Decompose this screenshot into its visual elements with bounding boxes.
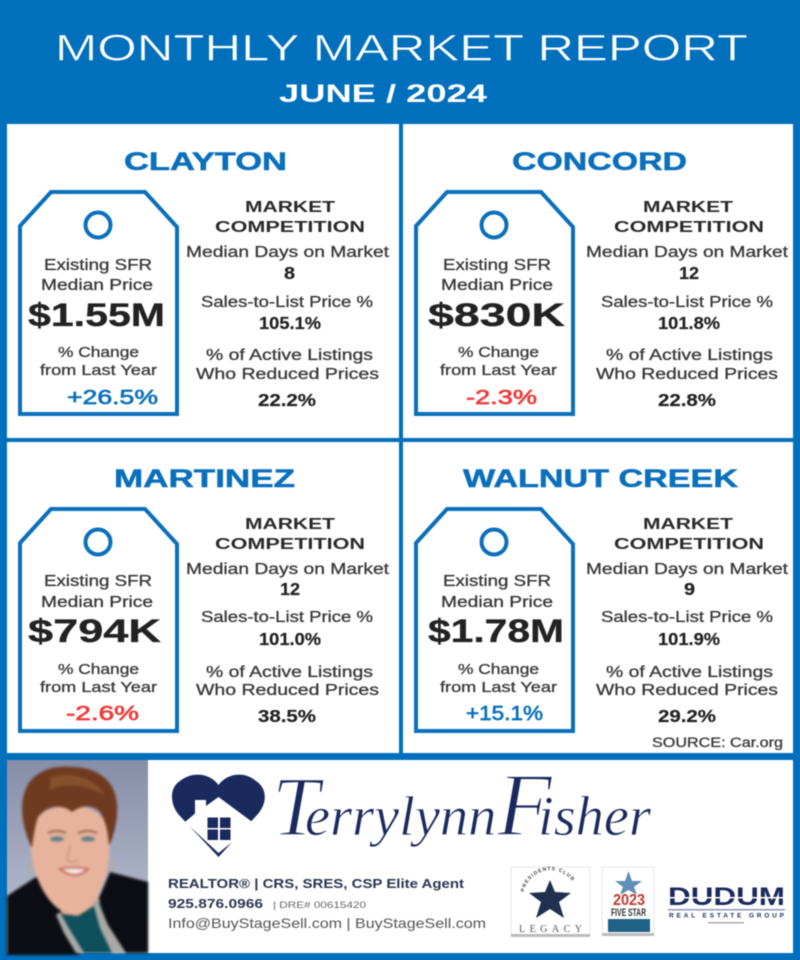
- market competition stats: Who Reduced Prices: [196, 682, 379, 699]
- price tag: % Change: [458, 344, 539, 361]
- price tag: $830K: [428, 297, 565, 333]
- market competition stats: MARKET: [245, 516, 335, 533]
- price tag: Existing SFR: [44, 573, 152, 590]
- panel: Walnut Creek: [403, 442, 793, 753]
- badge: Legacy: LEGACY: [519, 924, 582, 935]
- market competition stats: Who Reduced Prices: [596, 682, 778, 699]
- price tag: % Change: [58, 661, 139, 678]
- price tag: Median Price: [41, 277, 153, 294]
- price tag: Median Price: [441, 594, 553, 611]
- market competition stats: Sales-to-List Price %: [601, 609, 773, 626]
- price tag: from Last Year: [440, 362, 557, 379]
- market competition stats: 22.2%: [258, 390, 317, 410]
- heading: WALNUT CREEK: [463, 465, 738, 493]
- market competition stats: 9: [684, 579, 695, 599]
- market competition stats: % of Active Listings: [206, 347, 373, 364]
- market competition stats: 101.9%: [658, 629, 720, 649]
- logo: Dudum Real Estate Group: [668, 883, 785, 924]
- signature name: isher: [538, 786, 652, 848]
- badge: Legacy: PRESIDENTS CLUB: [520, 866, 575, 892]
- badge: Five Star 2023: 2023: [613, 892, 645, 909]
- market competition stats: COMPETITION: [614, 219, 764, 236]
- market competition stats: COMPETITION: [215, 219, 365, 236]
- market competition stats: COMPETITION: [215, 536, 365, 553]
- market competition stats: % of Active Listings: [206, 664, 373, 681]
- market competition stats: 12: [679, 263, 699, 283]
- agent phone: 925.876.0966: [168, 896, 263, 911]
- market competition stats: Who Reduced Prices: [196, 366, 379, 383]
- price tag: % Change: [58, 344, 139, 361]
- price tag: from Last Year: [440, 679, 557, 696]
- market competition stats: 101.8%: [658, 313, 720, 333]
- market competition stats: Median Days on Market: [586, 244, 789, 261]
- price tag: [416, 509, 573, 731]
- market competition stats: % of Active Listings: [606, 664, 773, 681]
- price tag: from Last Year: [40, 362, 157, 379]
- price tag: +15.1%: [466, 703, 543, 725]
- market competition stats: [186, 199, 390, 410]
- market competition stats: [586, 199, 789, 410]
- panel: Concord: [403, 124, 793, 438]
- market competition stats: [186, 516, 390, 726]
- price tag: % Change: [458, 661, 539, 678]
- price tag: [20, 509, 177, 731]
- license number: | DRE# 00615420: [273, 900, 366, 910]
- badge: Five Star 2023: [602, 867, 654, 936]
- signature name: T: [272, 760, 325, 854]
- price tag: $794K: [28, 613, 161, 649]
- price tag: [20, 192, 177, 414]
- market competition stats: 38.5%: [258, 706, 317, 726]
- heading: CLAYTON: [124, 148, 287, 176]
- badge: Five Star 2023: FIVE STAR: [611, 907, 646, 919]
- market competition stats: [586, 516, 789, 726]
- market competition stats: Median Days on Market: [186, 244, 390, 261]
- market competition stats: Sales-to-List Price %: [201, 609, 373, 626]
- heading: CONCORD: [512, 148, 687, 176]
- footer panel: [5, 756, 794, 957]
- market competition stats: % of Active Listings: [606, 347, 773, 364]
- price tag: [416, 192, 573, 414]
- price tag: $1.55M: [28, 297, 165, 333]
- market competition stats: 29.2%: [658, 706, 717, 726]
- market competition stats: Sales-to-List Price %: [201, 294, 373, 311]
- logo: heart with house: [172, 775, 265, 857]
- price tag: -2.6%: [66, 703, 139, 725]
- market competition stats: 22.8%: [658, 390, 717, 410]
- agent credentials: REALTOR® | CRS, SRES, CSP Elite Agent: [168, 876, 465, 891]
- market competition stats: COMPETITION: [614, 536, 764, 553]
- price tag: from Last Year: [40, 679, 157, 696]
- panel: Clayton: [7, 124, 399, 438]
- market competition stats: MARKET: [643, 516, 733, 533]
- market competition stats: Median Days on Market: [586, 561, 789, 578]
- source note: SOURCE: Car.org: [652, 735, 783, 750]
- market competition stats: MARKET: [643, 199, 733, 216]
- date: JUNE / 2024: [279, 80, 487, 108]
- market competition stats: 12: [280, 579, 300, 599]
- market competition stats: Who Reduced Prices: [596, 366, 778, 383]
- price tag: Median Price: [41, 594, 153, 611]
- market competition stats: MARKET: [245, 199, 335, 216]
- agent photo: [7, 760, 148, 955]
- logo: Dudum Real Estate Group: REAL ESTATE GROUP: [669, 912, 785, 920]
- logo: Dudum Real Estate Group: DUDUM: [668, 883, 785, 911]
- price tag: Existing SFR: [443, 573, 551, 590]
- market competition stats: 105.1%: [259, 313, 321, 333]
- market competition stats: 8: [284, 263, 295, 283]
- heading: MARTINEZ: [114, 465, 295, 493]
- title: MONTHLY MARKET REPORT: [55, 26, 748, 68]
- panel: Martinez: [7, 442, 399, 753]
- market competition stats: Sales-to-List Price %: [601, 294, 773, 311]
- price tag: Existing SFR: [443, 257, 551, 274]
- price tag: Existing SFR: [44, 257, 152, 274]
- price tag: Median Price: [441, 277, 553, 294]
- signature name: errylynn: [305, 786, 496, 848]
- header: [55, 26, 748, 108]
- price tag: +26.5%: [67, 387, 158, 409]
- market competition stats: 101.0%: [259, 629, 321, 649]
- price tag: $1.78M: [428, 613, 564, 649]
- agent contact: Info@BuyStageSell.com | BuyStageSell.com: [168, 915, 486, 931]
- signature name: F: [496, 756, 553, 855]
- price tag: -2.3%: [466, 387, 537, 409]
- market competition stats: Median Days on Market: [186, 561, 390, 578]
- badge: Legacy: [510, 866, 591, 938]
